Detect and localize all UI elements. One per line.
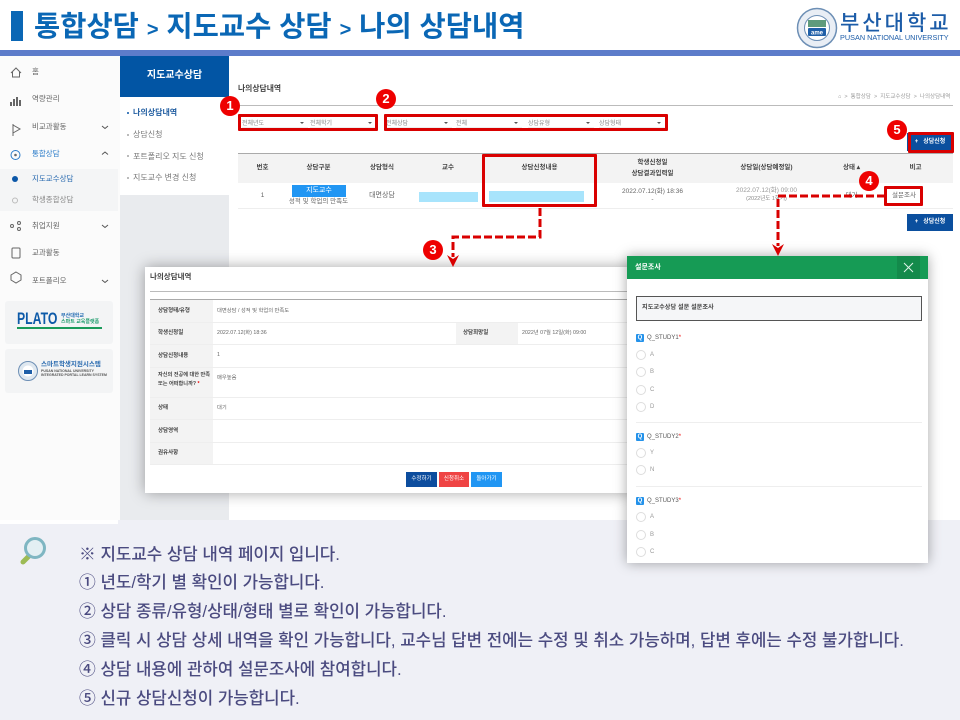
smart student support card xyxy=(5,349,113,393)
menu icons xyxy=(10,67,22,284)
submenu items: 상담신청 xyxy=(133,130,162,139)
detail table: 상담형태/유형 xyxy=(158,308,190,314)
highlight: year and semester filter xyxy=(238,114,378,131)
table header background xyxy=(238,154,953,183)
consultation table: - xyxy=(651,196,654,203)
marker 3 xyxy=(423,240,443,260)
survey question 2: N xyxy=(650,467,654,473)
consultation table: 상담신청내용 xyxy=(522,164,557,171)
filter dropdowns: 전체학기 xyxy=(310,121,332,127)
button: new consultation bottom xyxy=(907,214,953,231)
icon: close xyxy=(897,256,920,279)
arrow: survey button to survey modal xyxy=(772,194,884,256)
survey question 1: Q xyxy=(638,335,642,341)
PLATO underline xyxy=(17,327,102,329)
marker 4 xyxy=(859,171,879,191)
survey question 2 xyxy=(636,433,681,475)
button: edit xyxy=(406,472,437,487)
detail table: 상담신청내용 xyxy=(158,353,188,359)
detail table: 상태 xyxy=(158,405,168,411)
university name korean: 부산대학교 xyxy=(840,12,952,35)
consultation table: 상태 ▴ xyxy=(843,164,860,171)
panel: bottom description xyxy=(0,520,960,720)
survey question 3: C xyxy=(650,549,654,555)
survey question 1: A xyxy=(650,352,654,358)
detail table: 대기 xyxy=(217,405,227,411)
consultation table: 성적 및 학업의 만족도 xyxy=(289,198,348,205)
detail table: 권유사항 xyxy=(158,450,178,456)
filter dropdowns: 상담유형 xyxy=(528,121,550,127)
highlight: consultation filters xyxy=(384,114,668,131)
icon: university seal xyxy=(796,8,838,48)
sub menu bullets and chevrons xyxy=(12,126,108,283)
sidebar labels: 취업지원 xyxy=(32,221,60,230)
submenu items: 나의상담내역 xyxy=(133,108,177,117)
redacted professor xyxy=(419,192,478,202)
survey question 1: B xyxy=(650,369,654,375)
highlight: consultation content column xyxy=(482,154,597,207)
button: edit: 수정하기 xyxy=(411,476,432,482)
description text: ④ 상담 내용에 관하여 설문조사에 참여합니다. xyxy=(79,660,402,679)
submenu heading: 지도교수상담 xyxy=(147,70,202,81)
survey question 2: Q xyxy=(638,434,642,440)
consultation table: 비고 xyxy=(910,164,921,171)
card label xyxy=(41,360,107,377)
sidebar labels: 비교과활동 xyxy=(32,122,66,131)
survey question 3 xyxy=(636,497,681,557)
survey title: 설문조사 xyxy=(635,264,661,271)
marker 4: 4 xyxy=(865,173,873,188)
consultation table: 2022.07.12(화) 18:36 xyxy=(622,188,683,195)
consultation table: 상담결과입력일 xyxy=(632,170,673,176)
panel: submenu xyxy=(120,56,229,520)
detail table: 상담희망일 xyxy=(463,330,488,336)
sidebar labels: 학생종합상담 xyxy=(32,195,73,204)
consultation table: 대면상담 xyxy=(369,192,395,199)
PLATO subtitle xyxy=(61,312,99,325)
consultation table: 상담일(상담예정일) xyxy=(740,164,793,171)
detail table: 매우높음 xyxy=(217,375,236,381)
panel: left sidebar xyxy=(0,56,120,520)
survey divider xyxy=(636,486,922,487)
highlight: new consultation button xyxy=(908,132,954,153)
university logo xyxy=(796,8,952,48)
icon: emblem xyxy=(18,361,38,381)
consultation table: 설문조사 xyxy=(892,192,916,199)
consultation table: 대기 xyxy=(846,192,857,199)
breadcrumb: ⌂ > 통합상담 > 지도교수상담 > 나의상담내역 xyxy=(838,94,950,100)
detail table: 대면상담 / 성적 및 학업의 만족도 xyxy=(217,308,289,314)
PLATO logo text: PLATO xyxy=(17,309,57,328)
sidebar labels: 지도교수상담 xyxy=(32,174,73,183)
marker 2 xyxy=(376,89,396,109)
row values: 1 xyxy=(261,192,264,199)
consultation table: 2022.07.12(화) 09:00 xyxy=(736,187,797,194)
sidebar labels: 통합상담 xyxy=(32,149,60,158)
survey header xyxy=(627,256,928,279)
survey name box xyxy=(636,296,922,321)
button: back: 돌아가기 xyxy=(476,476,497,482)
button: new consultation bottom: + 상담신청 xyxy=(915,219,945,225)
sidebar labels: 포트폴리오 xyxy=(32,276,66,285)
icon: university seal: ame xyxy=(811,30,824,36)
survey divider xyxy=(636,422,922,423)
card label: 스마트학생지원시스템 xyxy=(41,361,101,368)
detail table: 학생신청일 xyxy=(158,330,183,336)
card label: INTEGRATED PORTAL LEARN SYSTEM xyxy=(41,373,107,377)
filter dropdowns: 전체 xyxy=(456,121,467,127)
consultation table: (2022년도 1학기) xyxy=(746,196,787,202)
category tag: 지도교수 xyxy=(306,187,332,194)
marker 3: 3 xyxy=(429,242,437,257)
filter dropdowns xyxy=(242,120,665,128)
detail table: 2022년 07월 12일(화) 09:00 xyxy=(522,330,586,336)
PLATO subtitle: 부산대학교 xyxy=(61,313,84,319)
header labels: 번호 xyxy=(257,164,268,171)
modal title: 나의상담내역 xyxy=(150,272,191,281)
survey question 3: B xyxy=(650,532,654,538)
survey question 3: Q xyxy=(638,498,642,504)
modal: consultation detail xyxy=(145,267,635,493)
survey question 1: D xyxy=(650,404,654,410)
marker 1: 1 xyxy=(226,98,234,113)
detail table: 1 xyxy=(217,352,220,358)
detail table: 자신의 전공에 대한 만족 xyxy=(158,372,210,378)
description text: ⑤ 신규 상담신청이 가능합니다. xyxy=(79,689,300,708)
panel: main content xyxy=(229,56,960,520)
sidebar labels: 역량관리 xyxy=(32,94,60,103)
category tag xyxy=(292,185,346,197)
title marker xyxy=(11,11,23,41)
survey question 1 xyxy=(636,334,681,412)
detail table: 또는 어떠합니까? * xyxy=(158,380,200,386)
marker 5: 5 xyxy=(893,122,901,137)
marker 2: 2 xyxy=(382,91,390,106)
card label: PUSAN NATIONAL UNIVERSITY xyxy=(41,369,94,373)
sidebar labels xyxy=(32,67,74,285)
highlight: survey button xyxy=(884,186,923,206)
submenu items xyxy=(127,108,204,182)
sidebar menu xyxy=(10,67,108,285)
survey question 3: Q_STUDY3* xyxy=(647,498,681,504)
description text xyxy=(79,545,904,708)
submenu heading xyxy=(120,56,229,97)
survey question 2: Q_STUDY2* xyxy=(647,434,681,440)
submenu list background xyxy=(120,97,229,195)
button: new consultation top: + 상담신청 xyxy=(915,139,945,145)
marker 5 xyxy=(887,120,907,140)
survey question 2: Y xyxy=(650,450,654,456)
detail table: 상담영역 xyxy=(158,428,178,434)
PLATO card xyxy=(5,301,113,344)
submenu items: 지도교수 변경 신청 xyxy=(133,173,196,182)
button: cancel xyxy=(439,472,469,487)
filter dropdowns: 전체상담 xyxy=(386,121,408,127)
modal: survey xyxy=(627,256,928,563)
detail table: 2022.07.12(화) 18:36 xyxy=(217,330,267,336)
description text: ② 상담 종류/유형/상태/형태 별로 확인이 가능합니다. xyxy=(79,602,447,621)
survey name box: 지도교수상담 설문 설문조사 xyxy=(642,304,714,311)
university name english: PUSAN NATIONAL UNIVERSITY xyxy=(840,33,949,42)
survey question 1: Q_STUDY1* xyxy=(647,335,681,341)
button: back xyxy=(471,472,502,487)
consultation table: 상담형식 xyxy=(370,164,394,171)
page heading: 나의상담내역 xyxy=(238,84,281,93)
heading rule xyxy=(238,105,953,106)
header bar xyxy=(0,0,960,56)
survey question 3: A xyxy=(650,514,654,520)
consultation table: 교수 xyxy=(442,164,454,171)
button: cancel: 신청취소 xyxy=(444,476,464,482)
survey question 1: C xyxy=(650,387,654,393)
marker 1 xyxy=(220,96,240,116)
button: new consultation top xyxy=(907,133,953,151)
PLATO subtitle: 스마트 교육플랫폼 xyxy=(61,319,99,325)
filter dropdowns: 전체년도 xyxy=(242,121,264,127)
sidebar labels: 교과활동 xyxy=(32,248,60,257)
icon: magnifier xyxy=(20,537,46,564)
arrow: content to detail modal xyxy=(447,208,542,267)
submenu items: 포트폴리오 지도 신청 xyxy=(133,152,204,161)
consultation table: 상담구분 xyxy=(307,164,330,171)
detail table xyxy=(150,299,632,465)
description text: ※ 지도교수 상담 내역 페이지 입니다. xyxy=(79,545,340,564)
modal rule xyxy=(150,291,632,292)
consultation table xyxy=(238,153,953,209)
filter dropdowns: 상담형태 xyxy=(599,121,621,127)
white notch under sidebar xyxy=(0,520,118,524)
header divider band xyxy=(0,50,960,56)
sidebar labels: 홈 xyxy=(32,67,39,76)
redacted content xyxy=(489,191,584,202)
description text: ① 년도/학기 별 확인이 가능합니다. xyxy=(79,573,324,592)
title: 통합상담 > 지도교수 상담 > 나의 상담내역 xyxy=(34,11,524,43)
description text: ③ 클릭 시 상담 상세 내역을 확인 가능합니다, 교수님 답변 전에는 수정 및 취소 가능하며, 답변 후에는 수정 불가합니다. xyxy=(79,631,904,650)
consultation table: 학생신청일 xyxy=(638,159,667,166)
